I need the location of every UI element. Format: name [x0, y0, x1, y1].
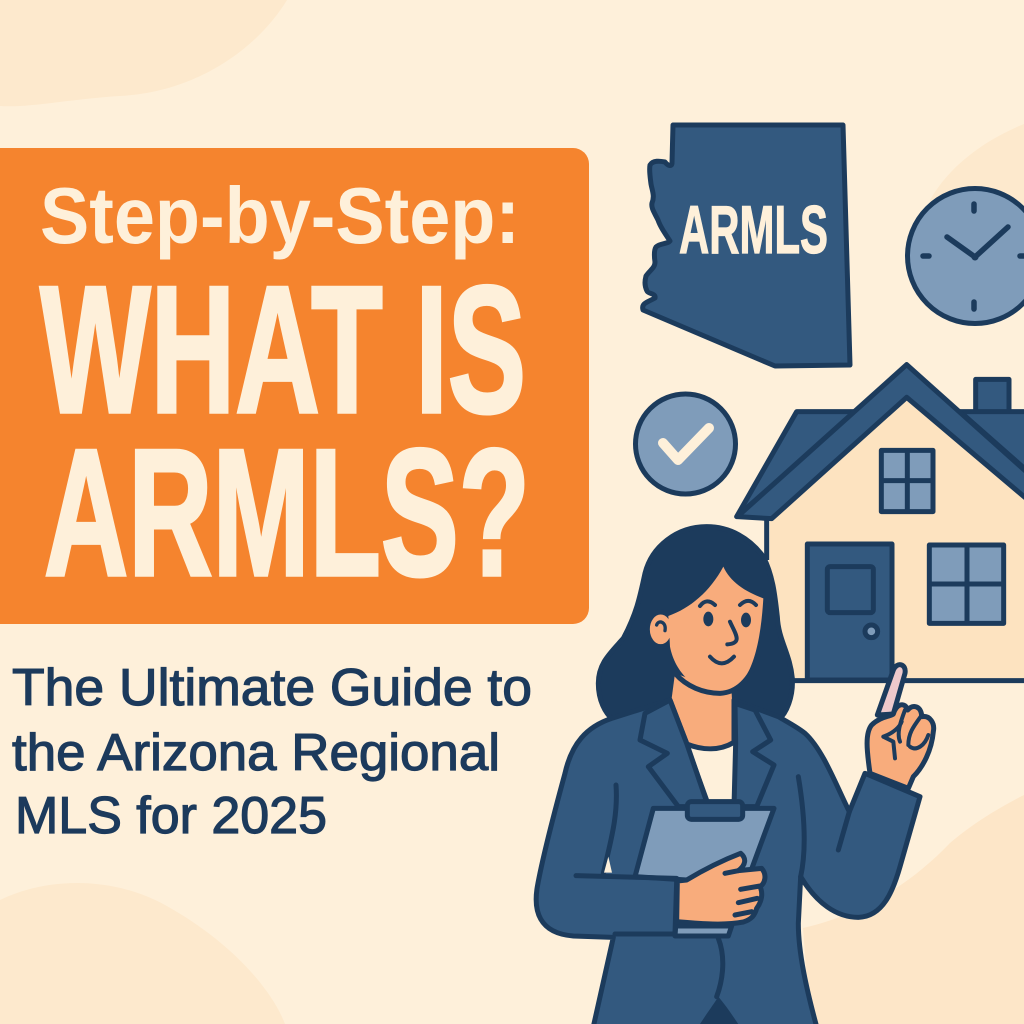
sleeve lines — [576, 876, 677, 934]
map label: ARMLS — [679, 192, 828, 268]
lower hand — [677, 853, 765, 924]
icon: Arizona state map — [643, 125, 850, 366]
main roof — [737, 365, 1024, 519]
shirt — [690, 744, 734, 799]
icon: clock — [908, 188, 1024, 324]
subtitle text block: the Arizona Regional — [12, 724, 500, 782]
face — [647, 567, 763, 693]
right roof wing — [960, 412, 1024, 473]
left lapel — [640, 700, 708, 807]
left roof wing — [737, 412, 857, 517]
subtitle text block — [12, 659, 532, 845]
raised hand — [867, 705, 934, 788]
icon: check badge — [636, 394, 736, 494]
clipboard — [635, 802, 774, 936]
pen — [877, 665, 905, 715]
upper window — [881, 450, 933, 512]
heading: step by step: Step-by-Step: — [40, 171, 520, 260]
heading: what is: WHAT IS — [40, 249, 526, 451]
house wall — [767, 398, 1024, 680]
chimney — [976, 379, 1009, 413]
jacket folds — [603, 777, 849, 997]
hair — [598, 527, 792, 720]
panel: orange title banner — [0, 148, 589, 624]
heading: armls: ARMLS? — [44, 412, 530, 614]
neck — [672, 673, 734, 750]
subtitle text block: MLS for 2025 — [15, 787, 327, 845]
lower window — [929, 545, 1004, 623]
illustration: woman with clipboard — [536, 527, 934, 1024]
jacket — [536, 700, 920, 1024]
ear — [647, 612, 674, 647]
right lapel — [734, 703, 774, 807]
ground line — [787, 673, 1024, 688]
subtitle text block: The Ultimate Guide to — [12, 659, 532, 717]
jacket hem — [698, 997, 740, 1024]
illustration: house — [737, 365, 1024, 681]
door — [807, 544, 892, 680]
